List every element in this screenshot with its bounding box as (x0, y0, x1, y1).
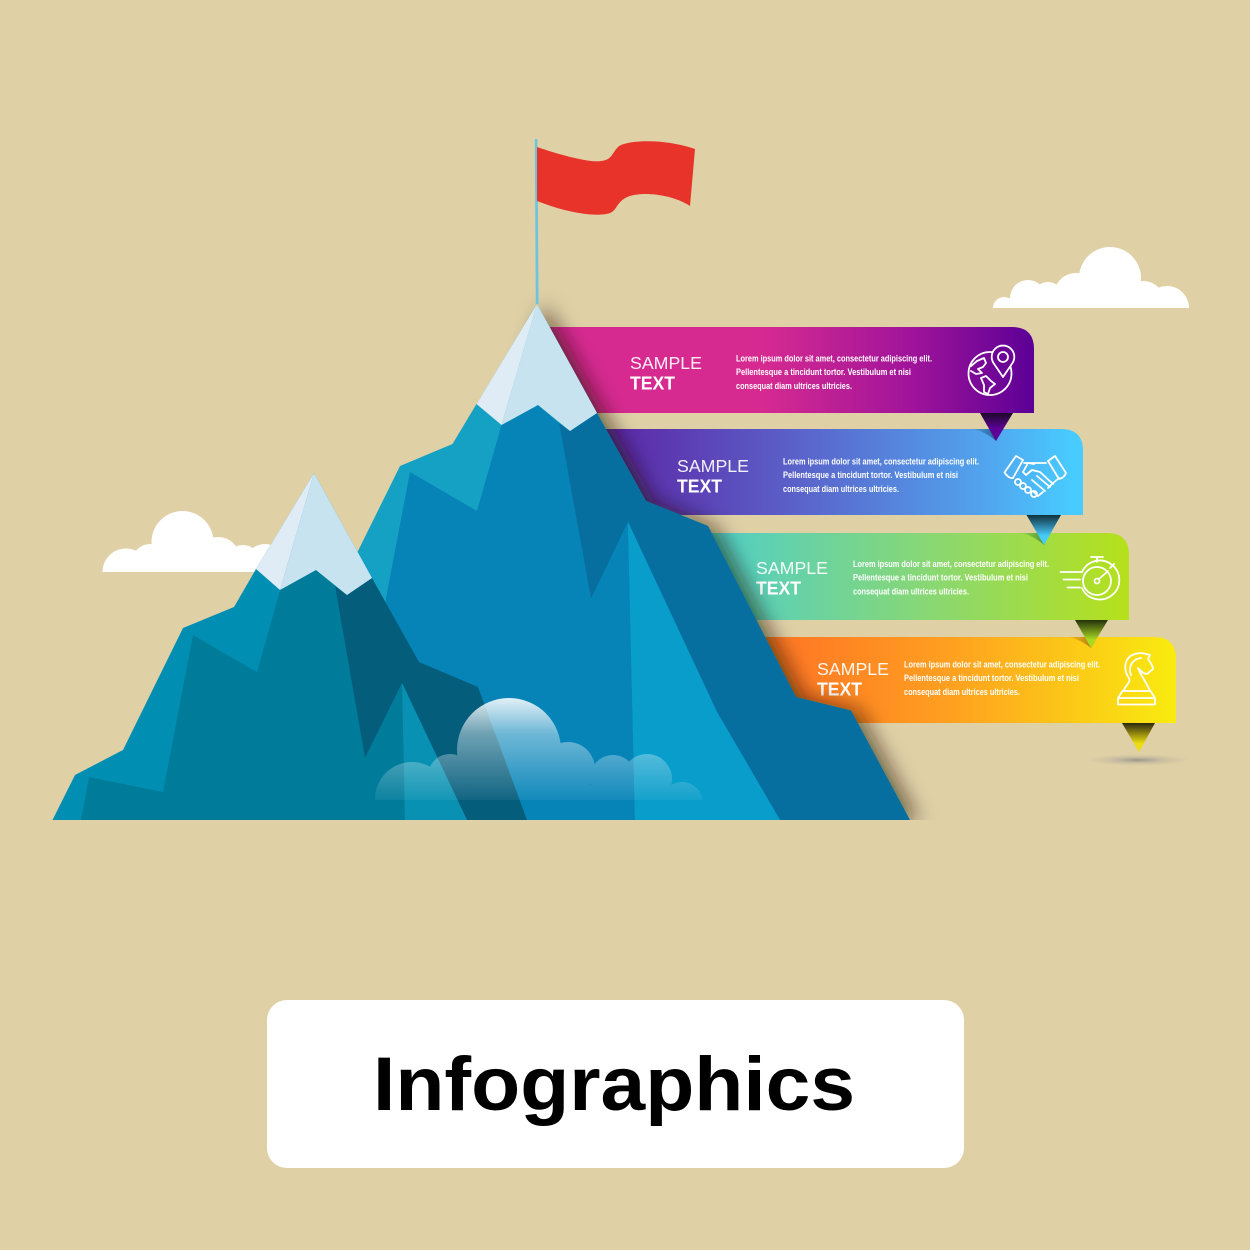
middle face (370, 405, 635, 820)
banner 2: Lorem ipsum dolor sit amet, consectetur adipiscing elit. (783, 456, 979, 466)
dark right face (559, 413, 910, 820)
icon: stopwatch (1060, 557, 1119, 600)
icon: handshake (1004, 456, 1066, 497)
outer face (52, 473, 527, 820)
infographic scene (52, 139, 1189, 1168)
banner 4 (750, 637, 1176, 723)
banner 2: Pellentesque a tincidunt tortor. Vestibulum et nisi (783, 470, 958, 480)
mountain shadow (508, 305, 918, 831)
banner 4: SAMPLE (817, 659, 889, 679)
small mountain (52, 473, 527, 820)
banner 3: Lorem ipsum dolor sit amet, consectetur adipiscing elit. (853, 559, 1049, 569)
pointer 4 (1122, 723, 1155, 752)
banner 3: TEXT (756, 578, 801, 598)
large mountain (300, 304, 910, 820)
banner 3: SAMPLE (756, 558, 828, 578)
pointer 3 (1067, 620, 1108, 648)
snow cap (280, 473, 372, 595)
banner 4: Pellentesque a tincidunt tortor. Vestibulum et nisi (904, 673, 1079, 683)
pointer 1 (971, 413, 1013, 441)
cloud: top right (993, 247, 1189, 308)
snow cap (502, 304, 597, 431)
banner 3 (700, 533, 1129, 620)
snow cap light side (476, 304, 537, 425)
banner 1: consequat diam ultrices ultricies. (736, 381, 852, 391)
banner 2 (595, 429, 1083, 515)
pointer 2 (1020, 515, 1061, 545)
banner 4: Lorem ipsum dolor sit amet, consectetur adipiscing elit. (904, 660, 1100, 670)
flag (535, 139, 695, 304)
inner face (81, 570, 467, 820)
snow cap light side (256, 473, 314, 590)
banner 2: consequat diam ultrices ultricies. (783, 484, 899, 494)
flag cloth (537, 141, 695, 215)
banner 1: TEXT (630, 374, 675, 394)
title card (267, 1000, 964, 1168)
banner 1: Lorem ipsum dolor sit amet, consectetur adipiscing elit. (736, 354, 932, 364)
cloud: left (102, 511, 270, 572)
light facet (402, 683, 467, 820)
banner 1: Pellentesque a tincidunt tortor. Vestibulum et nisi (736, 367, 911, 377)
banner 3: consequat diam ultrices ultricies. (853, 586, 969, 596)
banner 4: TEXT (817, 680, 862, 700)
foreground translucent cloud (375, 698, 702, 800)
flag pole (535, 139, 539, 304)
icon: globe with pin (968, 346, 1014, 395)
banner 1: SAMPLE (630, 353, 702, 373)
title: Infographics (373, 1042, 855, 1127)
banner 4: consequat diam ultrices ultricies. (904, 687, 1020, 697)
dark face (335, 578, 527, 820)
outer face (300, 304, 910, 820)
icon: chess knight (1118, 653, 1155, 704)
banner 2: SAMPLE (677, 456, 749, 476)
banner 3: Pellentesque a tincidunt tortor. Vestibulum et nisi (853, 572, 1028, 582)
banner 1 (540, 327, 1034, 413)
light facet (628, 522, 780, 820)
banner 2: TEXT (677, 476, 722, 496)
pointer shadow on ground (1084, 754, 1192, 766)
